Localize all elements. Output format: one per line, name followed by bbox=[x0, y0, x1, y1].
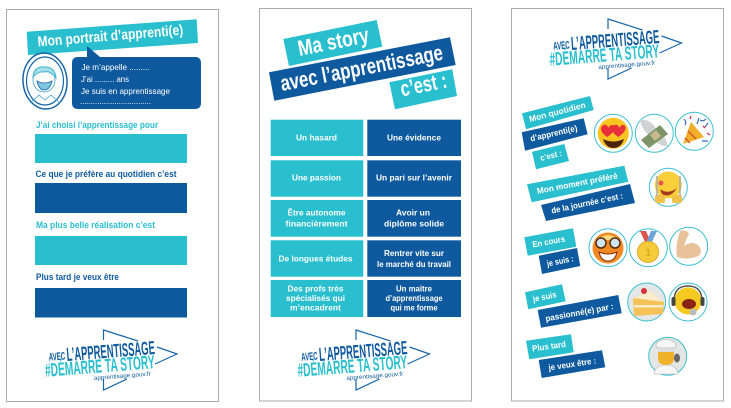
speech bubble: Je m’appelle ......... bbox=[82, 62, 150, 72]
question 1 bbox=[35, 120, 187, 163]
logo: avec l'apprentissage: AVEC bbox=[48, 351, 66, 364]
labels: plus tard je veux être bbox=[526, 334, 605, 378]
icon: singing face with headphones emoji bbox=[669, 283, 707, 321]
panel: ma story avec l'apprentissage bbox=[260, 8, 472, 401]
heading banner: avec l'apprentissage bbox=[269, 37, 456, 101]
labels: en cours je suis bbox=[524, 228, 580, 274]
grid of answers: Un maître bbox=[396, 284, 432, 294]
grid of answers: qui me forme bbox=[390, 302, 438, 312]
icon: cook emoji bbox=[649, 337, 687, 375]
question 2: Ce que je préfère au quotidien c’est bbox=[36, 169, 177, 180]
question 3 bbox=[35, 220, 187, 265]
grid of answers: m’encadrent bbox=[290, 302, 341, 312]
logo: avec l'apprentissage: AVEC bbox=[553, 40, 570, 53]
icon: gold medal emoji: 1 bbox=[645, 247, 651, 259]
labels: je suis passionné(e) par: je suis bbox=[531, 289, 558, 304]
logo: avec l'apprentissage: L’APPRENTISSAGE bbox=[318, 338, 408, 366]
icon: party popper emoji bbox=[675, 112, 713, 150]
speech bubble: Je suis en apprentissage bbox=[81, 86, 170, 96]
grid of answers: Des profs très bbox=[288, 284, 344, 294]
icon: gold medal emoji bbox=[629, 229, 667, 267]
question 4 bbox=[35, 272, 187, 318]
grid of answers: Rentrer vite sur bbox=[384, 248, 445, 258]
grid of answers: Un hasard bbox=[296, 132, 337, 142]
icon: portrait of smiling apprentice bbox=[21, 51, 69, 111]
labels: mon quotidien d'apprenti(e) c'est: d’apprenti(e) bbox=[529, 123, 578, 143]
icon: heart eyes emoji bbox=[594, 114, 632, 152]
grid of answers bbox=[271, 120, 461, 317]
logo: avec l'apprentissage: apprentisage.gouv.fr bbox=[598, 61, 655, 71]
logo: avec l'apprentissage: #DÉMARRE TA STORY bbox=[44, 351, 156, 382]
labels: je suis passionné(e) par: passionné(e) par : bbox=[545, 301, 614, 323]
labels: mon quotidien d'apprenti(e) c'est bbox=[522, 96, 594, 169]
grid of answers: Avoir un bbox=[396, 208, 430, 218]
icon: nerd face with glasses emoji bbox=[589, 229, 627, 267]
grid of answers: le marché du travail bbox=[377, 259, 451, 269]
icon: flying money emoji bbox=[635, 114, 673, 152]
logo: avec l'apprentissage: apprentisage.gouv.fr bbox=[346, 372, 403, 382]
logo: avec l'apprentissage bbox=[549, 19, 682, 79]
logo: avec l'apprentissage: L’APPRENTISSAGE bbox=[66, 338, 156, 366]
logo: avec l'apprentissage: AVEC bbox=[301, 351, 318, 364]
icon: cake slice emoji bbox=[628, 283, 666, 321]
heading banner: c'est: c’est : bbox=[398, 68, 449, 101]
labels: mon moment préféré de la journée c'est: Mon moment préféré bbox=[536, 170, 619, 196]
labels: mon quotidien d'apprenti(e) c'est: Mon quotidien bbox=[528, 100, 587, 124]
question 2 bbox=[35, 169, 187, 213]
icon: flexed biceps emoji bbox=[670, 227, 708, 265]
banner heading: Mon portrait d’apprenti(e) bbox=[37, 23, 184, 50]
heading banner: ma story: Ma story bbox=[296, 22, 372, 61]
labels: plus tard je veux être: je veux être : bbox=[547, 355, 597, 373]
grid of answers: Être autonome bbox=[288, 206, 346, 218]
labels: mon moment préféré de la journée c'est bbox=[527, 166, 635, 221]
heading banner: c'est bbox=[389, 68, 457, 109]
question 4: Plus tard je veux être bbox=[36, 272, 119, 283]
grid of answers: diplôme solide bbox=[384, 218, 444, 228]
speech bubble bbox=[72, 46, 201, 109]
labels: en cours je suis: je suis : bbox=[545, 253, 574, 269]
question 1: J’ai choisi l’apprentissage pour bbox=[36, 120, 158, 131]
speech bubble: ................................. bbox=[80, 97, 151, 106]
panel: mon quotidien emojis bbox=[512, 8, 724, 401]
icon: yummy face with cutlery emoji bbox=[649, 168, 687, 206]
logo: avec l'apprentissage bbox=[44, 330, 177, 390]
grid of answers: Une évidence bbox=[387, 132, 441, 142]
labels: plus tard je veux être: Plus tard bbox=[531, 339, 566, 353]
heading banner: avec l'apprentissage: avec l’apprentissage bbox=[278, 40, 445, 96]
labels: mon moment préféré de la journée c'est: de la journée c’est : bbox=[550, 190, 624, 215]
panel: mon portrait d'apprenti(e) bbox=[6, 10, 218, 402]
logo: avec l'apprentissage: apprentisage.gouv.fr bbox=[94, 372, 151, 382]
labels: mon quotidien d'apprenti(e) c'est: c’est : bbox=[539, 148, 563, 163]
grid of answers: financièrement bbox=[286, 218, 348, 228]
grid of answers: De longues études bbox=[278, 254, 353, 264]
labels: en cours je suis: En cours bbox=[532, 234, 566, 249]
grid of answers: spécialisés qui bbox=[286, 293, 345, 303]
grid of answers: Un pari sur l’avenir bbox=[376, 172, 453, 182]
speech bubble: J’ai ......... ans bbox=[81, 74, 129, 84]
logo: avec l'apprentissage: #DÉMARRE TA STORY bbox=[297, 351, 408, 382]
grid of answers: d’apprentissage bbox=[386, 293, 443, 303]
logo: avec l'apprentissage bbox=[297, 330, 430, 390]
grid of answers: Une passion bbox=[292, 172, 341, 182]
question 3: Ma plus belle réalisation c’est bbox=[36, 220, 156, 231]
labels: je suis passionné(e) par bbox=[525, 284, 622, 328]
